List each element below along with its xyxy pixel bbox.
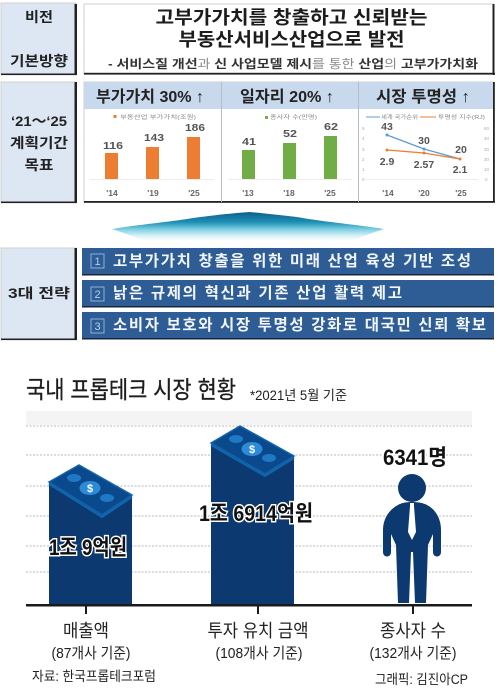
chart: market transparency: 5 bbox=[362, 126, 365, 131]
bar: revenue money stack: $ bbox=[87, 483, 93, 495]
axis baseline and ticks bbox=[26, 604, 472, 614]
chart: market transparency bbox=[362, 88, 490, 198]
label: 2021 to 2025 plan goals: 계획기간 bbox=[10, 135, 68, 151]
chart: market transparency: 시장 투명성 ↑ bbox=[376, 88, 470, 106]
chart: value added: 186 bbox=[185, 122, 205, 134]
section: proptech market status bbox=[26, 377, 472, 687]
chart: jobs: 62 bbox=[324, 121, 338, 133]
chart: market transparency: '25 bbox=[455, 188, 467, 198]
chart: market transparency: 50 bbox=[484, 126, 490, 131]
chart: market transparency: 30 bbox=[484, 147, 490, 152]
chart: jobs bbox=[228, 88, 352, 198]
label: vision and basic direction bbox=[1, 3, 77, 75]
label: revenue: 매출액 bbox=[63, 621, 109, 641]
strategy 3 bar: 소비자 보호와 시장 투명성 강화로 대국민 신뢰 확보 bbox=[113, 316, 486, 334]
value: investment: 1조 6914억원 bbox=[199, 501, 313, 526]
chart: market transparency: 1 bbox=[362, 167, 365, 172]
chart: market transparency: 2.1 bbox=[453, 164, 467, 176]
chart: value added: '14 bbox=[106, 188, 118, 198]
panel: vision statement: 고부가가치를 창출하고 신뢰받는 bbox=[156, 7, 428, 28]
chart: market transparency: 0 bbox=[485, 177, 488, 182]
panel: vision statement: - 서비스질 개선 과 신 사업모델 제시 를 통한 산업 의 고부가가치화 bbox=[108, 56, 478, 71]
chart: market transparency: 투명성 지수(RJ) bbox=[438, 113, 485, 121]
chart: jobs: 52 bbox=[283, 128, 297, 140]
strategy 1 bar bbox=[82, 248, 494, 276]
label: vision and basic direction: 비전 bbox=[25, 9, 53, 25]
chart: value added: 116 bbox=[103, 140, 123, 152]
strategy 2 bar bbox=[82, 280, 494, 308]
label: 2021 to 2025 plan goals: 목표 bbox=[24, 157, 54, 173]
strategy 1 bar: 1 bbox=[94, 256, 101, 268]
chart: jobs: 종사자 수(만명) bbox=[270, 113, 317, 121]
chart: market transparency: 2 bbox=[362, 157, 365, 162]
label: three strategies bbox=[1, 248, 77, 340]
chart: market transparency: '14 bbox=[382, 188, 394, 198]
credit: 그래픽: 김진아CP bbox=[375, 672, 468, 687]
chart: market transparency: '20 bbox=[418, 188, 430, 198]
chart: jobs: '25 bbox=[324, 188, 336, 198]
label: employees: (132개사 기준) bbox=[370, 645, 456, 662]
label: employees: 종사자 수 bbox=[380, 621, 446, 641]
panel: vision statement bbox=[84, 4, 495, 75]
label: vision and basic direction: 기본방향 bbox=[10, 53, 68, 69]
strategy 3 bar: 3 bbox=[94, 321, 101, 333]
label: revenue bbox=[52, 621, 131, 662]
chart: jobs: '13 bbox=[242, 188, 254, 198]
label: 2021 to 2025 plan goals: ‘21～‘25 bbox=[11, 113, 67, 129]
source: 자료: 한국프롭테크포럼 bbox=[32, 669, 156, 684]
panel: vision statement: 부동산서비스산업으로 발전 bbox=[178, 29, 404, 50]
bar: revenue money stack bbox=[49, 465, 132, 605]
chart: market transparency: 0 bbox=[362, 177, 365, 182]
strategy 2 bar: 2 bbox=[94, 289, 101, 301]
chart: market transparency: 2.9 bbox=[380, 156, 394, 168]
chart: market transparency: 3 bbox=[362, 147, 365, 152]
chart: market transparency: 20 bbox=[484, 157, 490, 162]
chart: market transparency: 10 bbox=[484, 167, 490, 172]
label: employees bbox=[370, 621, 456, 662]
label: investment bbox=[208, 621, 308, 662]
panel: goal charts bbox=[84, 82, 495, 203]
strategy 1 bar: 고부가가치 창출을 위한 미래 산업 육성 기반 조성 bbox=[113, 252, 471, 270]
label: revenue: (87개사 기준) bbox=[52, 645, 131, 662]
section: policy vision and goals bbox=[1, 3, 495, 340]
date note: *2021년 5월 기준 bbox=[250, 388, 347, 403]
chart background band and gridlines bbox=[26, 411, 472, 572]
chart: value added: 143 bbox=[144, 132, 164, 144]
title: 국내 프롭테크 시장 현황 bbox=[26, 377, 236, 404]
chart: value added: '25 bbox=[188, 188, 200, 198]
chart: market transparency: 43 bbox=[381, 121, 393, 133]
label: three strategies: 3대 전략 bbox=[8, 286, 71, 301]
chart: market transparency: 20 bbox=[455, 144, 467, 156]
value: employees: 6341명 bbox=[383, 445, 447, 470]
chart: value added: 부동산업 부가가치(조원) bbox=[120, 113, 196, 121]
chart: market transparency: 4 bbox=[362, 136, 365, 141]
chart: jobs: '18 bbox=[283, 188, 295, 198]
chart: market transparency: 40 bbox=[484, 136, 490, 141]
value: revenue: 1조 9억원 bbox=[49, 535, 127, 560]
label: investment: 투자 유치 금액 bbox=[208, 621, 308, 641]
strategy 2 bar: 낡은 규제의 혁신과 기존 산업 활력 제고 bbox=[113, 284, 402, 302]
chart: market transparency: 30 bbox=[418, 135, 430, 147]
chart: market transparency: 2.57 bbox=[414, 159, 434, 171]
bar: investment money stack: $ bbox=[249, 444, 255, 456]
bar: investment money stack bbox=[211, 426, 294, 605]
strategy 3 bar bbox=[82, 312, 494, 340]
chart: jobs: 일자리 20% ↑ bbox=[240, 88, 334, 106]
chart: value added: 부가가치 30% ↑ bbox=[96, 88, 204, 106]
chart: market transparency: 세계 국가순위 bbox=[381, 113, 418, 121]
chart: value added: '19 bbox=[147, 188, 159, 198]
icon: employee figure bbox=[383, 474, 441, 603]
arrow: upward gradient bbox=[112, 212, 384, 241]
chart: jobs: 41 bbox=[242, 136, 256, 148]
label: 2021 to 2025 plan goals bbox=[1, 82, 77, 203]
chart: value added bbox=[90, 88, 214, 198]
label: investment: (108개사 기준) bbox=[216, 645, 302, 662]
